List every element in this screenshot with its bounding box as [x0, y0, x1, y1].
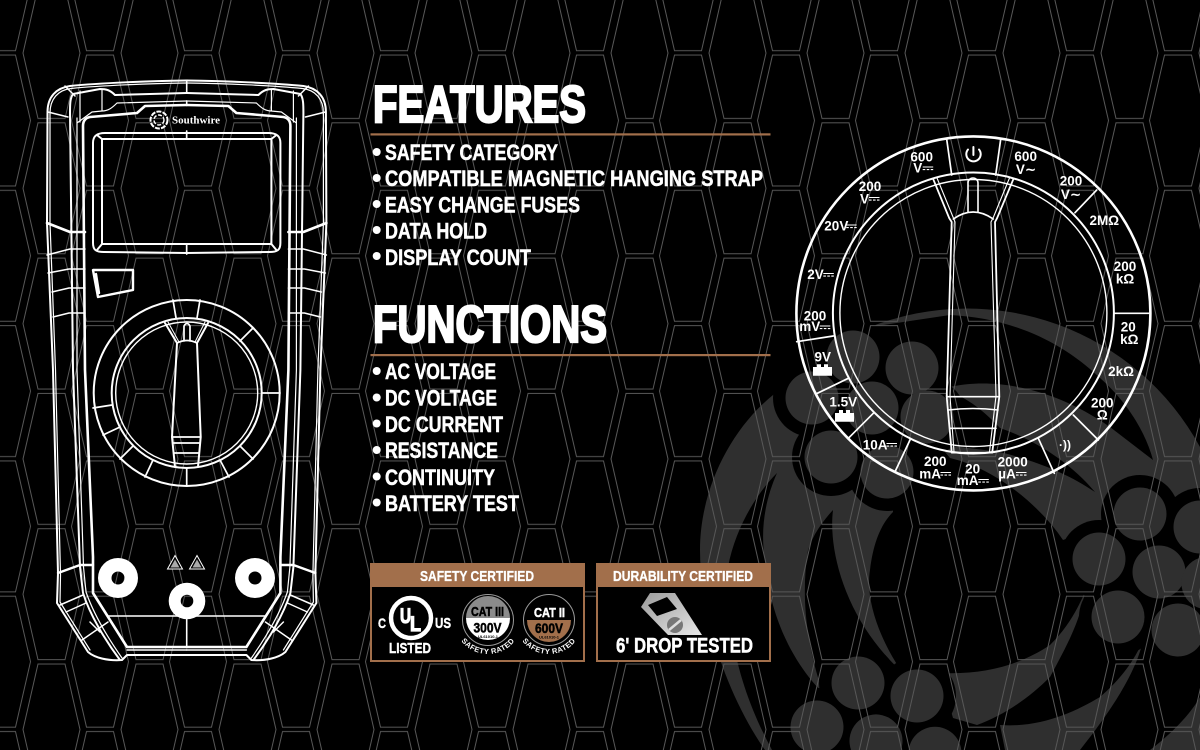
panel: safety certified: SAFETY CERTIFIED	[420, 569, 534, 585]
icon: power	[966, 147, 981, 161]
dial labels: ·))	[1059, 438, 1071, 452]
functions list: DC VOLTAGE	[385, 386, 497, 410]
dial labels: mV	[799, 319, 820, 334]
dial labels: Ω	[1097, 407, 1108, 422]
dial labels: V∼	[1061, 187, 1081, 202]
badge: CAT III 300V: SAFETY RATED	[462, 638, 514, 654]
dial labels: µA	[998, 466, 1016, 481]
dial labels: 600	[1014, 149, 1037, 164]
badge: CAT III 300V: UL61010-1	[478, 634, 499, 639]
features list	[373, 140, 763, 270]
features list: DISPLAY COUNT	[385, 245, 531, 270]
rotary dial	[93, 300, 280, 486]
panel: safety certified	[370, 563, 585, 662]
badge: UL listed: US	[435, 615, 451, 632]
badge: CAT II 600V: 600V	[535, 620, 564, 636]
logo: Southwire	[150, 112, 220, 128]
dial rings	[796, 136, 1150, 490]
functions list: AC VOLTAGE	[385, 359, 496, 384]
dial labels: 1.5V	[829, 395, 857, 410]
functions list: DC CURRENT	[385, 412, 503, 437]
input jacks	[98, 558, 275, 619]
badge: UL listed: L	[410, 613, 421, 636]
heading: features: FEATURES	[373, 76, 586, 134]
badge: UL listed: LISTED	[389, 640, 431, 657]
dial labels: 2000	[998, 455, 1028, 470]
watermark: swirl logo	[700, 309, 1200, 750]
panel: durability certified: 6' DROP TESTED	[616, 634, 753, 658]
dial labels: 200	[1060, 174, 1082, 189]
badge: UL listed: C	[378, 615, 386, 631]
badge: UL listed	[378, 598, 451, 657]
functions list	[373, 359, 519, 516]
dial labels: 20V	[824, 219, 848, 234]
badge: UL listed: U	[400, 605, 411, 628]
badge: CAT II 600V: SAFETY RATED	[522, 638, 574, 654]
dial labels: 200	[924, 454, 947, 469]
warning triangles	[168, 556, 204, 569]
badge: CAT II 600V: UL61010-1	[539, 634, 560, 640]
panel: durability certified: DURABILITY CERTIFIED	[613, 569, 753, 585]
multimeter outline illustration	[47, 80, 326, 660]
dial labels: 2MΩ	[1090, 213, 1119, 228]
logo: Southwire: Southwire	[172, 116, 220, 126]
dial labels: V∼	[1016, 162, 1036, 177]
dial labels: 600	[910, 150, 933, 165]
badge: CAT III 300V	[462, 594, 514, 654]
dial labels: V	[860, 191, 869, 206]
functions list: RESISTANCE	[385, 438, 498, 463]
features list: DATA HOLD	[385, 218, 487, 244]
dial labels: 2kΩ	[1108, 364, 1134, 379]
features list: EASY CHANGE FUSES	[385, 192, 580, 218]
dial labels: 10A	[863, 437, 888, 452]
dial labels: 200	[804, 309, 826, 324]
dial labels: 2V	[807, 267, 824, 282]
dial labels: 200	[859, 179, 881, 194]
dial labels	[799, 147, 1139, 488]
dial labels: 20	[1121, 320, 1136, 335]
badge: CAT II 600V	[522, 594, 575, 654]
icon: dropped meter	[641, 593, 702, 635]
features list: COMPATIBLE MAGNETIC HANGING STRAP	[385, 166, 763, 191]
dial labels: V	[913, 161, 922, 176]
dial labels: 200	[1114, 259, 1136, 274]
dial labels: mA	[919, 466, 941, 481]
dial labels: 200	[1091, 395, 1114, 410]
panel: durability certified	[596, 563, 771, 661]
features divider	[370, 133, 770, 136]
dial labels: kΩ	[1120, 332, 1139, 347]
badge: CAT II 600V: CAT II	[534, 605, 565, 620]
dial labels: 20	[965, 461, 980, 476]
functions list: CONTINUITY	[385, 465, 495, 490]
functions divider	[370, 354, 770, 356]
dial labels: mA	[957, 473, 979, 488]
features list: SAFETY CATEGORY	[385, 140, 558, 165]
dial labels: kΩ	[1116, 271, 1134, 286]
dial labels: 9V	[814, 350, 831, 365]
heading: functions: FUNCTIONS	[373, 296, 607, 354]
rotary selector dial diagram	[796, 136, 1150, 490]
dial pointer handle	[933, 178, 1013, 453]
functions list: BATTERY TEST	[385, 491, 519, 516]
mode button	[93, 270, 133, 297]
badge: CAT III 300V: CAT III	[471, 604, 504, 619]
badge: CAT III 300V: 300V	[474, 620, 502, 636]
